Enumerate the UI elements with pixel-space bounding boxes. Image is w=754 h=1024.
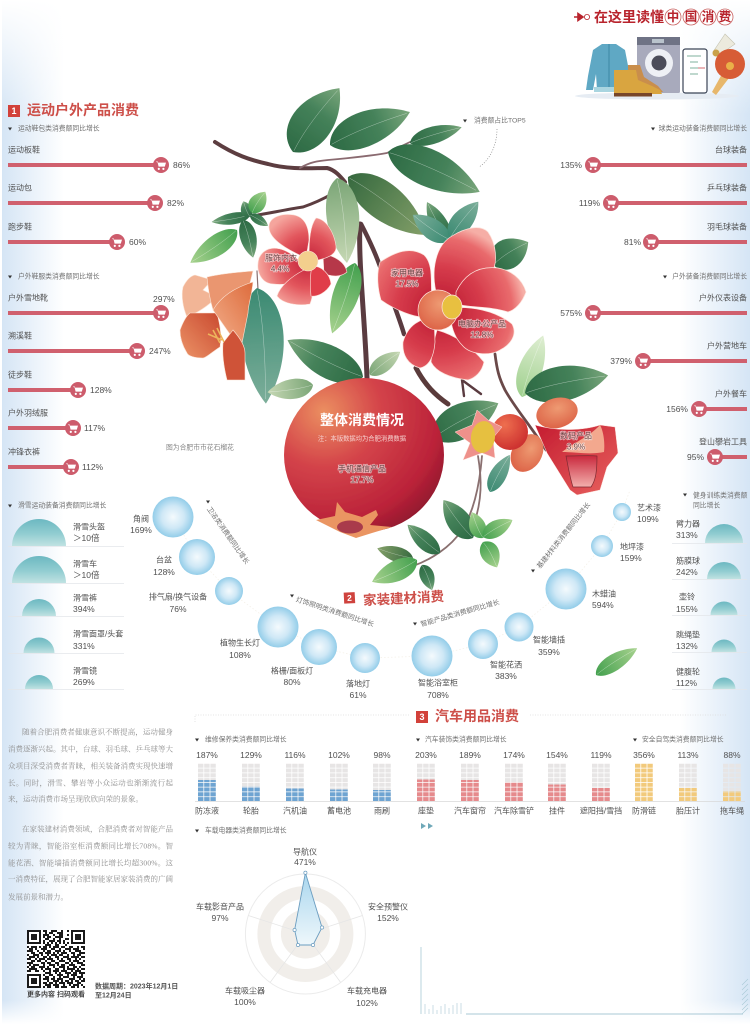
section 1 heading: 1	[11, 106, 17, 116]
flower share labels: 服饰内衣	[265, 252, 297, 262]
panel: fitness equipment: 313%	[676, 530, 698, 540]
panel: ski equipment: 滑雪运动装备消费额同比增长	[18, 500, 107, 510]
panel: ball sports bars: 135%	[560, 160, 582, 170]
radar chart: in-car electronics: 车载电器类消费额同比增长	[205, 826, 287, 834]
data period note	[95, 982, 178, 1000]
fruit flower	[535, 425, 618, 495]
section 3 heading: 3	[419, 712, 425, 722]
panel: ball sports bars: 球类运动装备消费额同比增长	[659, 124, 747, 132]
header: title with arrow: 中	[667, 9, 679, 24]
text block: analysis paragraph 2: 一消费特征，展现了合肥智能家居家装消费的广阔	[8, 874, 174, 884]
panel: car maintenance waffle chart: 蓄电池	[327, 806, 351, 816]
panel: ball sports bars: 台球装备	[715, 144, 747, 154]
panel: ski equipment: ＞10倍	[73, 533, 100, 543]
panel: car maintenance waffle chart: 129%	[240, 750, 262, 760]
panel: outdoor shoes and clothing bars: 户外雪地靴	[8, 292, 48, 302]
panel: car maintenance waffle chart: 轮胎	[243, 806, 259, 816]
panel: outdoor shoes and clothing bars: 冲锋衣裤	[8, 446, 40, 456]
panel: base materials bubbles: 木蜡油	[592, 588, 616, 598]
panel: bathroom bubbles: 角阀	[133, 514, 149, 524]
panel: base materials bubbles: 艺术漆	[637, 502, 661, 512]
panel: smart product bubbles: 708%	[427, 690, 449, 700]
panel: ski equipment: ＞10倍	[73, 570, 100, 580]
panel: outdoor equipment bars: 户外餐车	[715, 388, 747, 398]
panel: driving safety waffle chart: 356%	[633, 750, 655, 760]
panel: ball sports bars	[560, 124, 747, 250]
panel: smart product bubbles: 智能墙插	[533, 634, 565, 644]
text block: analysis paragraph 1: 众项目深受消费者青睐，相关装备消费实现快速增	[8, 760, 174, 772]
panel: outdoor equipment bars: 户外仪表设备	[699, 292, 747, 302]
flower share labels: 家用电器	[391, 268, 423, 278]
panel: outdoor equipment bars	[560, 272, 747, 465]
data period note: 至12月24日	[95, 992, 132, 1000]
panel: lighting bubbles: 落地灯	[346, 678, 370, 688]
panel: lighting bubbles: 植物生长灯	[220, 638, 260, 648]
panel: car maintenance waffle chart: 雨刷	[374, 806, 390, 816]
panel: fitness equipment: 筋膜球	[676, 556, 700, 566]
panel: driving safety waffle chart	[195, 734, 745, 816]
panel: fitness equipment: 242%	[676, 567, 698, 577]
header: title with arrow: 国	[685, 10, 697, 24]
panel: base materials bubbles: 159%	[620, 553, 642, 563]
panel: outdoor equipment bars: 户外装备消费额同比增长	[672, 272, 747, 280]
panel: sports shoes and bags bars: 60%	[129, 237, 146, 247]
panel: outdoor shoes and clothing bars: 112%	[82, 462, 104, 472]
decorative empty chart frame	[421, 823, 748, 1014]
panel: car maintenance waffle chart	[195, 734, 391, 816]
panel: fitness equipment: 132%	[676, 641, 698, 651]
panel: fitness equipment: 112%	[676, 678, 698, 688]
panel: sports shoes and bags bars: 运动包	[8, 182, 32, 192]
panel: smart product bubbles: 智能产品类消费额同比增长	[419, 597, 501, 628]
panel: ski equipment	[8, 500, 124, 690]
panel: ski equipment: 269%	[73, 677, 95, 687]
panel: sports shoes and bags bars: 运动板鞋	[8, 144, 40, 154]
text block: analysis paragraph 2: 能花洒、智能墙插消费额同比增长均超300%。这	[8, 858, 174, 868]
panel: driving safety waffle chart: 113%	[677, 750, 699, 760]
radar chart: in-car electronics: 车载影音产品	[196, 902, 244, 912]
flower share labels: 17.5%	[396, 280, 418, 288]
header: title with arrow	[574, 9, 733, 25]
panel: lighting bubbles	[220, 594, 432, 700]
QR caption: 更多内容 扫码观看	[27, 990, 85, 998]
header: title with arrow: 消	[702, 9, 714, 24]
radar chart: in-car electronics	[195, 826, 408, 1008]
panel: outdoor equipment bars: 登山攀岩工具	[699, 436, 747, 446]
panel: outdoor shoes and clothing bars: 117%	[84, 423, 106, 433]
panel: lighting bubbles: 61%	[349, 690, 367, 700]
panel: ski equipment: 滑雪裤	[73, 592, 97, 602]
panel: fitness equipment	[672, 490, 748, 690]
panel: fitness equipment: 同比增长	[693, 500, 720, 510]
section 3 heading	[195, 708, 727, 724]
flower share labels	[265, 252, 592, 452]
panel: outdoor equipment bars: 379%	[610, 356, 632, 366]
header: title with arrow: 费	[719, 9, 732, 24]
panel: car maintenance waffle chart: 汽机油	[283, 806, 307, 816]
panel: car decoration waffle chart: 汽车装饰类消费额同比增长	[425, 734, 507, 744]
panel: fitness equipment: 155%	[676, 604, 698, 614]
panel: car maintenance waffle chart: 98%	[373, 750, 391, 760]
panel: car maintenance waffle chart: 187%	[196, 750, 218, 760]
orange flower	[180, 271, 253, 380]
radar chart: in-car electronics: 102%	[356, 998, 378, 1008]
panel: smart product bubbles	[412, 589, 566, 700]
text block: analysis paragraph 1	[8, 726, 174, 804]
panel: base materials bubbles: 109%	[637, 514, 659, 524]
panel: sports shoes and bags bars: 86%	[173, 160, 190, 170]
panel: car decoration waffle chart: 189%	[459, 750, 481, 760]
panel: outdoor shoes and clothing bars: 户外羽绒服	[8, 408, 48, 418]
panel: outdoor equipment bars: 156%	[666, 404, 688, 414]
panel: bathroom bubbles: 卫浴类消费额同比增长	[205, 505, 252, 566]
branches	[215, 142, 546, 566]
header: title with arrow: 在这里读懂	[594, 9, 664, 25]
panel: sports shoes and bags bars: 82%	[167, 198, 184, 208]
QR code	[27, 930, 85, 988]
text block: analysis paragraph 1: 消费逐渐兴起。其中，台球、羽毛球、乒乓球等大	[8, 744, 174, 754]
panel: outdoor shoes and clothing bars: 128%	[90, 385, 112, 395]
flower share labels: 数码产品	[560, 430, 592, 440]
panel: bathroom bubbles: 128%	[153, 567, 175, 577]
panel: car decoration waffle chart: 154%	[546, 750, 568, 760]
caption: 图为合肥市市花石榴花	[166, 442, 234, 452]
panel: driving safety waffle chart: 防滑链	[632, 806, 656, 816]
flower share labels: 3.9%	[567, 442, 585, 452]
panel: outdoor equipment bars: 户外营地车	[707, 340, 747, 350]
text block: analysis paragraph 1: 随着合肥消费者健康意识不断提高，运动健身	[22, 726, 174, 738]
panel: ski equipment: 滑雪车	[73, 558, 97, 568]
panel: sports shoes and bags bars	[8, 124, 190, 250]
panel: bathroom bubbles: 台盆	[156, 554, 172, 564]
panel: lighting bubbles: 108%	[229, 650, 251, 660]
radar chart: in-car electronics: 导航仪	[293, 846, 317, 856]
pomegranate fruit	[284, 378, 444, 538]
panel: ski equipment: 331%	[73, 641, 95, 651]
panel: lighting bubbles: 格栅/面板灯	[271, 666, 313, 676]
panel: car maintenance waffle chart: 102%	[328, 750, 350, 760]
panel: bathroom bubbles	[130, 496, 278, 627]
text block: analysis paragraph 2: 在家装建材消费领域，合肥消费者对智能产品	[22, 824, 174, 834]
text block: analysis paragraph 2: 较为青睐，智能浴室柜消费额同比增长708%。智	[8, 840, 174, 852]
radar chart: in-car electronics: 97%	[211, 913, 229, 923]
flower share labels: 12.8%	[471, 330, 493, 340]
panel: ball sports bars: 乒乓球装备	[707, 182, 747, 192]
panel: fitness equipment: 臂力器	[676, 518, 700, 528]
panel: outdoor shoes and clothing bars: 户外鞋服类消费额同比增长	[18, 272, 100, 280]
panel: car decoration waffle chart	[415, 734, 622, 816]
radar chart: in-car electronics: 471%	[294, 857, 316, 867]
panel: lighting bubbles: 灯饰照明类消费额同比增长	[295, 595, 375, 629]
panel: outdoor shoes and clothing bars	[8, 272, 175, 475]
panel: outdoor shoes and clothing bars: 247%	[149, 346, 171, 356]
label: TOP5 callout	[463, 116, 526, 167]
panel: car maintenance waffle chart: 防冻液	[195, 806, 219, 816]
radar chart: in-car electronics: 车载吸尘器	[225, 986, 265, 996]
panel: driving safety waffle chart: 胎压计	[676, 806, 700, 816]
panel: ski equipment: 394%	[73, 604, 95, 614]
panel: ski equipment: 滑雪面罩/头套	[73, 628, 123, 638]
panel: ski equipment: 滑雪头盔	[73, 522, 105, 532]
panel: sports shoes and bags bars: 运动鞋包类消费额同比增长	[18, 124, 100, 132]
radar chart: in-car electronics: 车载充电器	[347, 986, 387, 996]
panel: fitness equipment: 跳绳垫	[676, 630, 700, 640]
panel: driving safety waffle chart: 88%	[723, 750, 741, 760]
panel: ball sports bars: 羽毛球装备	[707, 222, 747, 232]
panel: base materials bubbles: 地坪漆	[620, 542, 644, 552]
text block: analysis paragraph 2: 发展前景和潜力。	[8, 892, 68, 902]
label: TOP5 callout: 消费额占比TOP5	[474, 116, 526, 124]
panel: ski equipment: 滑雪镜	[73, 666, 97, 676]
panel: driving safety waffle chart: 拖车绳	[720, 806, 744, 816]
panel: fitness equipment: 健腹轮	[676, 666, 700, 676]
panel: bathroom bubbles: 76%	[169, 604, 187, 614]
text block: analysis paragraph 1: 来，运动消费市场呈现欣欣向荣的景象。	[8, 794, 143, 804]
panel: car maintenance waffle chart: 116%	[284, 750, 306, 760]
panel: ball sports bars: 81%	[624, 237, 641, 247]
section 3 heading: 汽车用品消费	[435, 708, 519, 724]
pomegranate heading and note: 整体消费情况	[320, 412, 404, 428]
panel: fitness equipment: 壶铃	[679, 592, 695, 602]
panel: car decoration waffle chart: 119%	[590, 750, 612, 760]
data period note: 数据周期：2023年12月1日	[95, 982, 178, 990]
panel: fitness equipment: 健身训练类消费额	[693, 490, 748, 500]
illustration: pomegranate branch with flowers	[180, 75, 641, 681]
header illustration: consumer goods	[575, 34, 745, 100]
panel: car decoration waffle chart: 汽车除雪铲	[494, 806, 534, 816]
panel: outdoor shoes and clothing bars: 徒步鞋	[8, 370, 32, 380]
panel: outdoor shoes and clothing bars: 溯溪鞋	[8, 330, 32, 340]
panel: outdoor equipment bars: 575%	[560, 308, 582, 318]
section 2 heading: 家装建材消费	[363, 588, 445, 608]
panel: smart product bubbles: 智能浴室柜	[418, 678, 458, 688]
panel: car decoration waffle chart: 203%	[415, 750, 437, 760]
panel: car decoration waffle chart: 挂件	[549, 806, 565, 816]
small flower and buds	[455, 393, 581, 478]
flower share labels: 电脑办公产品	[458, 318, 506, 328]
pomegranate heading and note	[318, 412, 407, 484]
text block: analysis paragraph 1: 长。同时，滑雪、攀岩等小众运动也渐渐流行起	[8, 778, 174, 788]
panel: car decoration waffle chart: 174%	[503, 750, 525, 760]
radar chart: in-car electronics: 安全预警仪	[368, 902, 408, 912]
panel: car decoration waffle chart: 遮阳挡/雪挡	[580, 806, 622, 816]
text block: analysis paragraph 2	[8, 824, 174, 902]
pomegranate heading and note: 17.7%	[351, 476, 373, 484]
panel: smart product bubbles: 383%	[495, 671, 517, 681]
panel: bathroom bubbles: 排气扇/换气设备	[149, 592, 207, 602]
panel: base materials bubbles: 基建材料类消费额同比增长	[535, 500, 592, 570]
panel: base materials bubbles: 594%	[592, 600, 614, 610]
panel: smart product bubbles: 359%	[538, 647, 560, 657]
big right flower	[378, 228, 526, 380]
panel: ball sports bars: 119%	[579, 198, 600, 208]
panel: smart product bubbles: 智能花洒	[490, 660, 522, 670]
flower share labels: 4.4%	[271, 264, 289, 274]
panel: car maintenance waffle chart: 维修保养类消费额同比增长	[205, 734, 287, 744]
panel: driving safety waffle chart: 安全自驾类消费额同比增长	[642, 734, 724, 744]
pomegranate heading and note: 手机通信产品	[338, 464, 386, 474]
panel: car decoration waffle chart: 汽车窗帘	[454, 806, 486, 816]
left flower	[258, 215, 347, 305]
panel: sports shoes and bags bars: 跑步鞋	[8, 222, 32, 232]
panel: car decoration waffle chart: 座垫	[418, 806, 434, 816]
panel: bathroom bubbles: 169%	[130, 525, 152, 535]
radar chart: in-car electronics: 152%	[377, 913, 399, 923]
section 2 heading: 2	[347, 593, 352, 603]
pomegranate heading and note: 注：本版数据均为合肥消费数据	[318, 434, 407, 442]
panel: outdoor equipment bars: 95%	[687, 452, 704, 462]
radar chart: in-car electronics: 100%	[234, 997, 256, 1007]
section 1 heading: 运动户外产品消费	[27, 102, 139, 118]
panel: outdoor shoes and clothing bars: 297%	[153, 294, 175, 304]
panel: base materials bubbles	[531, 490, 661, 610]
leaves	[185, 75, 641, 681]
panel: lighting bubbles: 80%	[283, 677, 301, 687]
